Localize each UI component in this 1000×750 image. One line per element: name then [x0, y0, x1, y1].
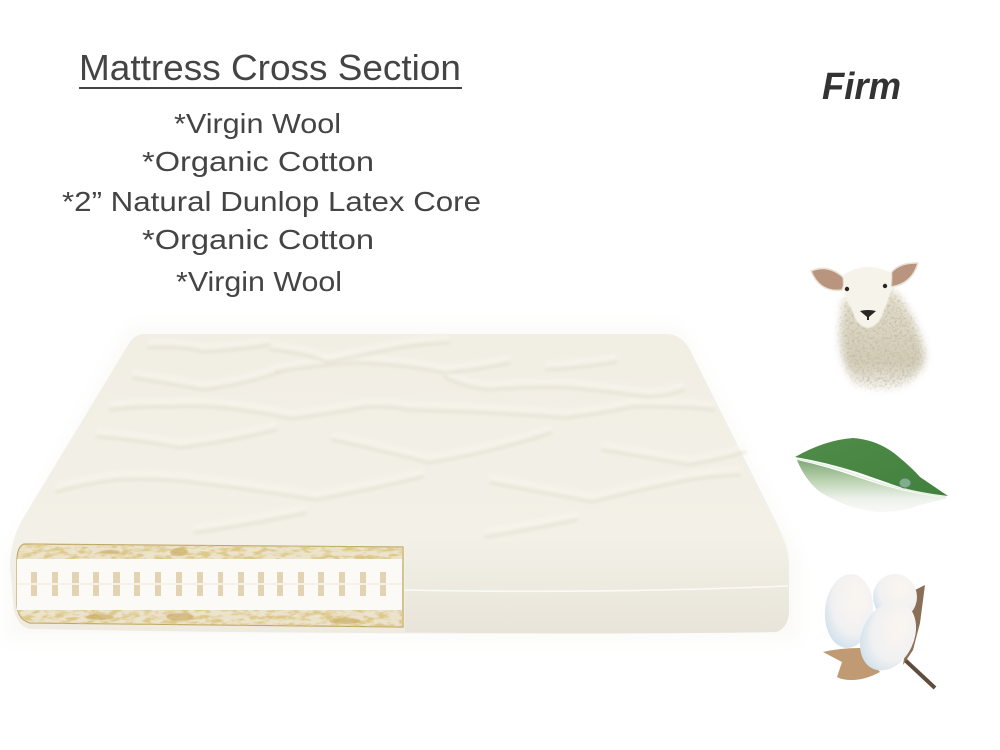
- cross section cutaway: [16, 543, 404, 628]
- latex core center line: [17, 583, 402, 585]
- wool mottling: [86, 548, 361, 624]
- layer: virgin wool bottom: *Virgin Wool: [176, 266, 342, 297]
- sheep ears: [811, 268, 846, 290]
- quilting pattern: [56, 343, 745, 537]
- title: Mattress Cross Section: [79, 47, 461, 88]
- layer: latex core: *2” Natural Dunlop Latex Core: [62, 186, 481, 217]
- sheep wool body: [840, 290, 925, 389]
- layer: virgin wool top: *Virgin Wool: [174, 108, 341, 139]
- mattress: [5, 326, 800, 640]
- mattress body: [10, 334, 789, 633]
- cotton husk: [823, 648, 880, 680]
- leaf underside: [797, 460, 948, 512]
- leaf fold highlight: [797, 459, 946, 497]
- zipper seam: [404, 586, 788, 591]
- layer list: [62, 108, 481, 297]
- cotton bolls: [822, 572, 876, 650]
- cutaway frame: [17, 544, 403, 627]
- water drop: [899, 478, 911, 488]
- firmness label: Firm: [822, 66, 901, 108]
- sheep face: [845, 284, 887, 320]
- cotton stem: [905, 660, 935, 688]
- latex core holes: [31, 572, 386, 596]
- layer: organic cotton top: *Organic Cotton: [142, 146, 374, 177]
- icon: leaf: [795, 438, 948, 512]
- layer: organic cotton bottom: *Organic Cotton: [142, 224, 374, 255]
- sheep head: [843, 267, 892, 328]
- icon: sheep: [811, 263, 925, 389]
- mattress side panel: [405, 530, 789, 634]
- quilting highlights: [56, 337, 745, 531]
- wool texture: [16, 543, 404, 628]
- mattress glow: [5, 326, 800, 640]
- latex core: [17, 559, 402, 610]
- leaf top: [795, 438, 948, 496]
- icon: cotton boll: [822, 572, 935, 688]
